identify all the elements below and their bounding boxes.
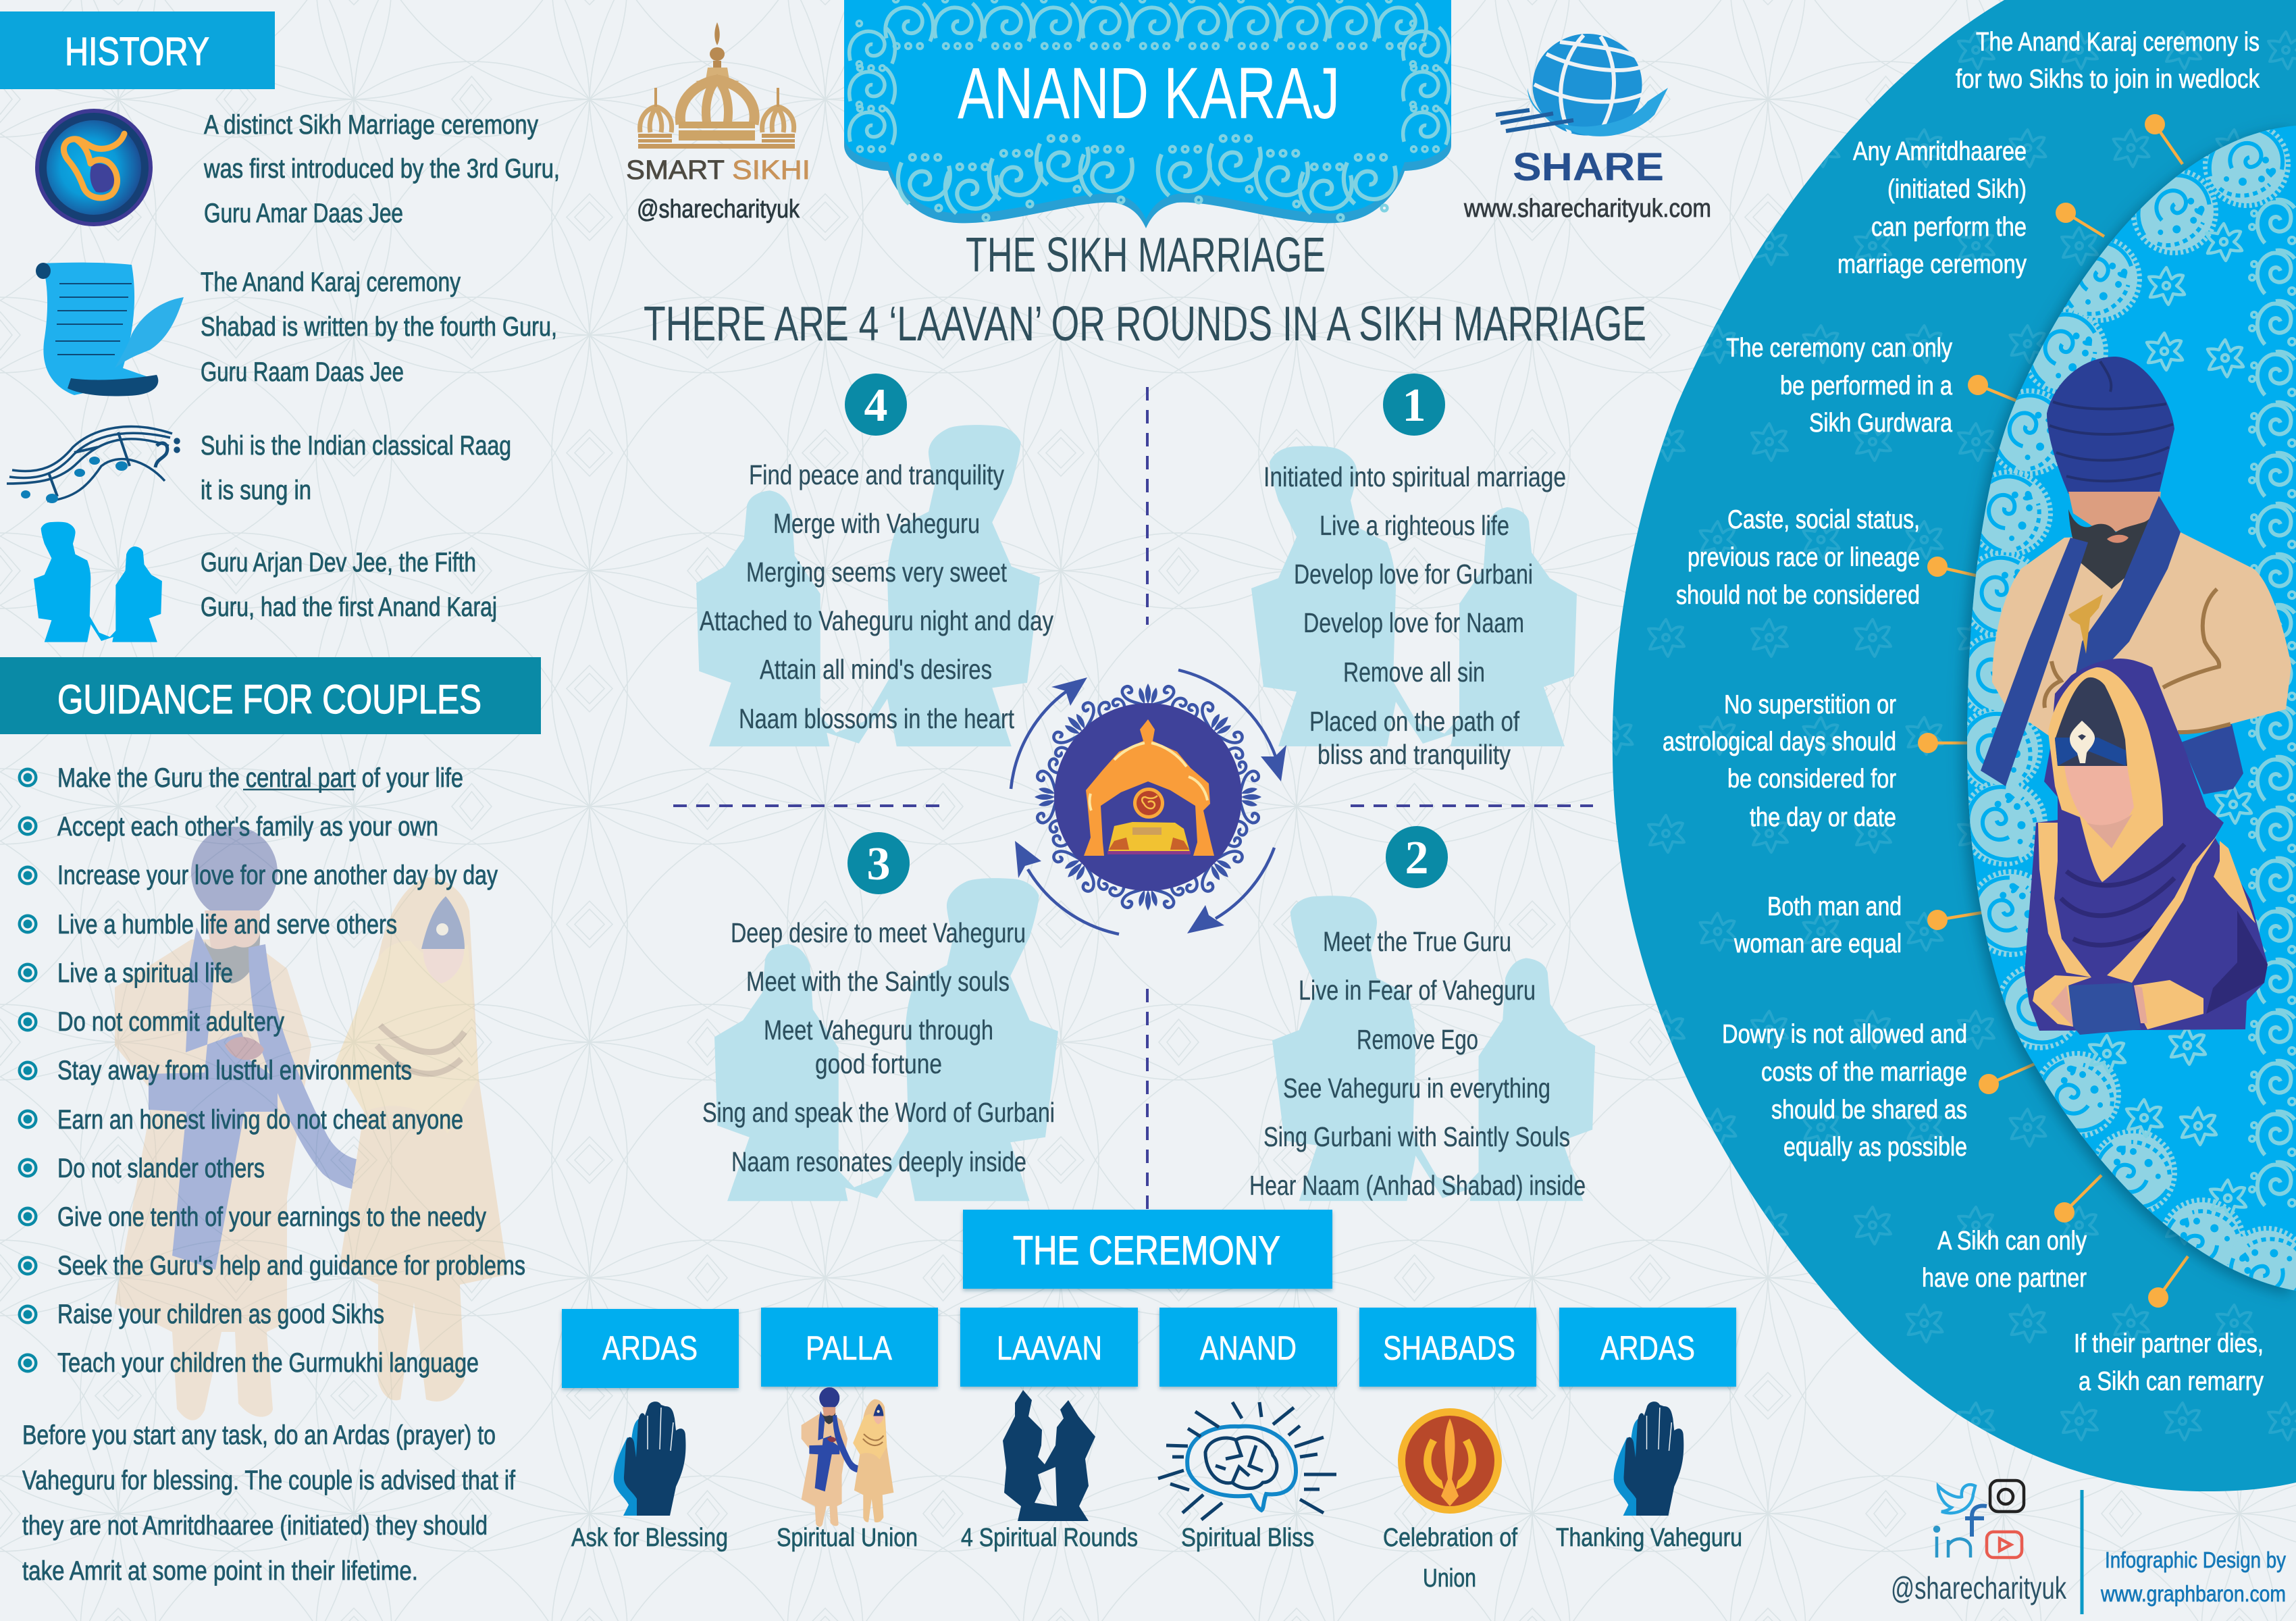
text: any Amritdhaaree: marriage ceremony: [1837, 250, 2027, 279]
arrow: round cycle 3: [1015, 841, 1119, 934]
text: any Amritdhaaree: Any Amritdhaaree: [1853, 137, 2027, 166]
badge 2: [1386, 826, 1448, 888]
bullet list: Live a spiritual life: [57, 958, 233, 988]
text: caste and status: [1676, 505, 1920, 610]
text: dowry: should be shared as: [1771, 1096, 1967, 1125]
bullet list: Make the Guru the central part of your life: [57, 763, 463, 793]
arrow: round cycle 4: [1011, 677, 1087, 789]
step: anand: [1158, 1308, 1337, 1552]
round 2 text: Hear Naam (Anhad Shabad) inside: [1249, 1170, 1586, 1201]
bullet list: Earn an honest living do not cheat anyone: [57, 1105, 463, 1135]
text: one partner: have one partner: [1922, 1264, 2087, 1293]
illustration: groom: [1981, 357, 2291, 794]
round 4 text: Attached to Vaheguru night and day: [700, 605, 1053, 636]
bullet list: Stay away from lustful environments: [57, 1056, 412, 1085]
text: no superstition: the day or date: [1750, 803, 1896, 832]
step: laavan: [960, 1308, 1138, 1552]
round 1 text: bliss and tranquility: [1317, 739, 1511, 770]
round 2 text: Sing Gurbani with Saintly Souls: [1263, 1121, 1570, 1152]
text: caste and status: Caste, social status,: [1727, 505, 1920, 534]
round 2 text: Meet the True Guru: [1323, 926, 1511, 957]
panel: the ceremony: [562, 1210, 1742, 1593]
text: equality: Both man and: [1767, 892, 1902, 921]
arrow: round cycle 1: [1178, 670, 1286, 781]
watermark couple illustration: [115, 827, 508, 1420]
step: laavan: LAAVAN: [997, 1329, 1102, 1367]
text: one partner: A Sikh can only: [1937, 1227, 2087, 1256]
text: Guru Arjan Dev Jee: Guru, had the first Anand Karaj: [201, 592, 497, 622]
subtitle: 4 laavan: THERE ARE 4 ‘LAAVAN’ OR ROUNDS IN A SIKH MARRIAGE: [644, 297, 1646, 351]
round 3 text: Meet with the Saintly souls: [746, 966, 1010, 997]
text: ardas advice paragraph: Vaheguru for blessing. The couple is advised that if: [22, 1466, 516, 1495]
round 4 text: [700, 459, 1053, 734]
silhouette: [696, 425, 1040, 746]
silhouette: [1272, 896, 1595, 1201]
round 4 text: Merging seems very sweet: [746, 557, 1007, 588]
text: remarry: a Sikh can remarry: [2079, 1367, 2264, 1396]
heading: the ceremony: THE CEREMONY: [1013, 1228, 1280, 1273]
step: shabads: SHABADS: [1383, 1329, 1515, 1367]
text: the ceremony is for two Sikhs: [1956, 28, 2260, 94]
step: laavan: 4 Spiritual Rounds: [961, 1524, 1138, 1552]
bullet list: Increase your love for one another day by day: [57, 860, 498, 890]
heading: history: HISTORY: [65, 30, 209, 74]
text: any Amritdhaaree: [1837, 137, 2027, 279]
text: Guru Arjan Dev Jee: [201, 548, 497, 622]
subtitle: the sikh marriage: THE SIKH MARRIAGE: [966, 228, 1326, 282]
text: dowry: costs of the marriage: [1761, 1058, 1967, 1087]
round 2 text: See Vaheguru in everything: [1283, 1073, 1550, 1104]
round 1 text: Initiated into spiritual marriage: [1263, 461, 1566, 492]
text: first ceremony: was first introduced by the 3rd Guru,: [203, 154, 560, 184]
step: anand: Spiritual Bliss: [1181, 1524, 1314, 1552]
round 4 text: Naam blossoms in the heart: [739, 703, 1014, 734]
round 3 text: Sing and speak the Word of Gurbani: [702, 1097, 1055, 1128]
badge 4: [845, 374, 907, 436]
round 3 text: Naam resonates deeply inside: [731, 1146, 1026, 1177]
bullet list: Raise your children as good Sikhs: [57, 1300, 384, 1329]
connector lines to the principles: [1918, 114, 2188, 1308]
title banner: [844, 0, 1451, 228]
round 3 text: Deep desire to meet Vaheguru: [731, 917, 1026, 948]
step: anand: ANAND: [1200, 1329, 1297, 1367]
heading: history: [0, 11, 275, 89]
silhouette: [1251, 446, 1577, 746]
step: palla: PALLA: [806, 1329, 893, 1367]
text: no superstition: No superstition or: [1724, 690, 1896, 719]
panel: guidance for couples: [0, 657, 541, 1586]
text: ardas advice paragraph: [22, 1420, 516, 1586]
step: palla: [761, 1308, 938, 1552]
heading: the ceremony: [963, 1210, 1332, 1289]
text: first ceremony: Guru Amar Daas Jee: [204, 199, 403, 228]
bullet list: [18, 763, 525, 1378]
round 2 text: [1249, 926, 1586, 1201]
round 4 text: Merge with Vaheguru: [773, 508, 980, 539]
panel: round 2: [1249, 826, 1595, 1201]
round 3 text: Meet Vaheguru through: [764, 1014, 993, 1046]
badge 2: 2: [1405, 832, 1429, 884]
arrow: round cycle 2: [1187, 848, 1274, 933]
bullet list: Live a humble life and serve others: [57, 910, 397, 940]
icon: couple silhouette: [34, 522, 162, 642]
round 1 text: Develop love for Naam: [1303, 607, 1524, 638]
step: ardas: Ask for Blessing: [571, 1524, 728, 1552]
icon: scroll and quill: [36, 263, 184, 396]
bullet list: Do not commit adultery: [57, 1007, 284, 1037]
step: closing ardas: Thanking Vaheguru: [1556, 1524, 1742, 1552]
illustration: bride: [2025, 659, 2268, 1035]
heading: guidance: GUIDANCE FOR COUPLES: [57, 677, 481, 722]
step: shabads: Union: [1423, 1564, 1476, 1593]
text: one partner: [1922, 1227, 2087, 1293]
bullet list: Accept each other's family as your own: [57, 812, 438, 842]
step: ardas: ARDAS: [602, 1329, 698, 1367]
logo: Smart Sikhi: SIKHI: [732, 155, 810, 185]
text: shabad written by fourth Guru: Guru Raam Daas Jee: [201, 357, 404, 387]
text: performed in a Gurdwara: be performed in a: [1780, 371, 1952, 401]
text: Raag Suhi: it is sung in: [201, 475, 311, 505]
central emblem with palki: [1031, 680, 1265, 914]
heading: guidance: [0, 657, 541, 734]
round 3 text: [702, 917, 1055, 1177]
text: performed in a Gurdwara: Sikh Gurdwara: [1809, 409, 1952, 438]
bullet list: Give one tenth of your earnings to the needy: [57, 1202, 486, 1232]
badge 3: 3: [867, 838, 890, 890]
badge 4: 4: [864, 380, 887, 432]
round 2 text: Remove Ego: [1357, 1024, 1478, 1055]
text: ardas advice paragraph: Before you start any task, do an Ardas (prayer) to: [22, 1420, 496, 1450]
text: performed in a Gurdwara: [1726, 334, 1952, 438]
round 4 text: Attain all mind's desires: [760, 654, 992, 685]
text: equality: woman are equal: [1733, 929, 1902, 958]
text: Raag Suhi: [201, 431, 511, 505]
silhouette: [714, 878, 1058, 1201]
step: palla: Spiritual Union: [777, 1524, 918, 1552]
panel: round 4: [696, 374, 1053, 746]
text: shabad written by fourth Guru: Shabad is written by the fourth Guru,: [201, 312, 557, 342]
text: Raag Suhi: Suhi is the Indian classical Raag: [201, 431, 511, 461]
round 1 text: [1263, 461, 1566, 770]
panel: inner bright oval with paisley border: [1950, 123, 2296, 1318]
step: closing ardas: ARDAS: [1600, 1329, 1695, 1367]
round 1 text: Develop love for Gurbani: [1294, 559, 1533, 590]
bullet list: Do not slander others: [57, 1154, 265, 1183]
logo: SHARE charity: SHARE: [1513, 145, 1664, 189]
logo: Smart Sikhi: [626, 22, 810, 224]
text: ardas advice paragraph: they are not Amritdhaaree (initiated) they should: [22, 1511, 488, 1541]
text: caste and status: previous race or lineage: [1688, 543, 1920, 572]
credit: designer: [2100, 1547, 2286, 1606]
panel: round 3: [702, 832, 1058, 1201]
badge 3: [847, 832, 910, 894]
text: any Amritdhaaree: (initiated Sikh): [1887, 175, 2027, 204]
text: any Amritdhaaree: can perform the: [1871, 213, 2027, 242]
handle: sharecharityuk: @sharecharityuk: [1891, 1570, 2067, 1605]
step: shabads: [1359, 1308, 1536, 1593]
text: remarry: If their partner dies,: [2074, 1329, 2264, 1358]
text: no superstition: be considered for: [1727, 765, 1896, 794]
text: no superstition: astrological days should: [1663, 727, 1896, 756]
icon: ik onkar medallion: [35, 109, 153, 226]
step: shabads: Celebration of: [1383, 1524, 1517, 1552]
logo: SHARE charity: [1463, 34, 1711, 223]
dashed dividers: [673, 387, 1593, 1209]
text: dowry: Dowry is not allowed and: [1722, 1020, 1967, 1049]
text: shabad written by fourth Guru: [201, 267, 557, 387]
text: no superstition: [1663, 690, 1896, 832]
panel: right-hand principles oval: [1613, 0, 2296, 1491]
logo: Smart Sikhi: @sharecharityuk: [637, 195, 800, 224]
logo: Smart Sikhi: SMART: [626, 155, 725, 185]
round 4 text: Find peace and tranquility: [749, 459, 1004, 490]
text: ardas advice paragraph: take Amrit at some point in their lifetime.: [22, 1556, 418, 1586]
round 1 text: Placed on the path of: [1309, 706, 1519, 737]
bullet list: Seek the Guru's help and guidance for problems: [57, 1251, 525, 1281]
text: remarry: [2074, 1329, 2264, 1396]
text: first ceremony: [203, 110, 560, 228]
round 2 text: Live in Fear of Vaheguru: [1299, 975, 1536, 1006]
text: performed in a Gurdwara: The ceremony can only: [1726, 334, 1952, 363]
badge 1: [1383, 374, 1445, 436]
title banner: ANAND KARAJ: [958, 52, 1340, 134]
panel: history: [0, 11, 560, 642]
text: caste and status: should not be considered: [1676, 581, 1920, 610]
text: shabad written by fourth Guru: The Anand Karaj ceremony: [201, 267, 461, 297]
text: dowry: [1722, 1020, 1967, 1162]
round 1 text: Remove all sin: [1343, 657, 1485, 688]
text: equality: [1733, 892, 1902, 958]
bullet list: Teach your children the Gurmukhi language: [57, 1348, 479, 1378]
ornamental swirls: [850, 0, 1449, 220]
step: ardas: [562, 1309, 739, 1552]
logo: SHARE charity: www.sharecharityuk.com: [1463, 195, 1711, 223]
icon: music staff: [7, 427, 179, 503]
social icons: [1935, 1481, 2024, 1558]
text: first ceremony: A distinct Sikh Marriage ceremony: [204, 110, 538, 140]
step: closing ardas: [1556, 1308, 1742, 1552]
round 3 text: good fortune: [815, 1048, 942, 1079]
panel: round 1: [1251, 374, 1577, 770]
text: Guru Arjan Dev Jee: Guru Arjan Dev Jee, the Fifth: [201, 548, 476, 577]
round 1 text: Live a righteous life: [1320, 510, 1509, 541]
badge 1: 1: [1402, 380, 1426, 432]
text: dowry: equally as possible: [1783, 1133, 1967, 1162]
